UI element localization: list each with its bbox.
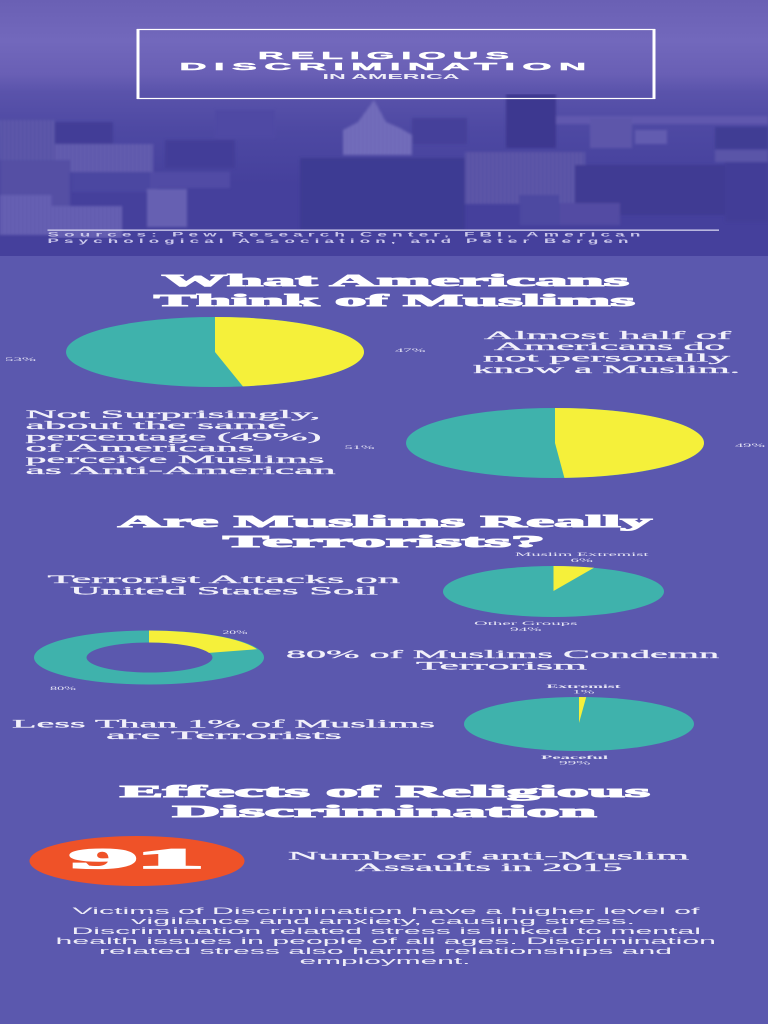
heading: what Americans think: What Americans: [162, 271, 631, 290]
stat badge: 91: 91: [70, 844, 204, 875]
text: almost half: Almost half of: [484, 330, 732, 342]
pie chart: anti-American: [344, 408, 766, 478]
pie chart: extremist share: [464, 684, 694, 766]
heading: what Americans think: Think of Muslims: [154, 291, 637, 310]
text: 80 percent condemn: 80% of Muslims Condemn: [286, 649, 720, 661]
heading: terrorists: [118, 512, 655, 551]
pie chart: know a Muslim: [5, 317, 427, 387]
pie chart: anti-American: 49%: [735, 443, 766, 449]
heading: what Americans think: [154, 271, 637, 310]
text: not surprisingly: about the same: [26, 420, 286, 432]
text: assault count: Assaults in 2015: [355, 862, 623, 874]
text: less than 1 percent: are Terrorists: [106, 730, 344, 742]
pie chart: extremist share: 1%: [572, 690, 596, 696]
text: 80 percent condemn: [286, 649, 720, 672]
heading: terrorists: Terrorists?: [223, 532, 545, 551]
heading: effects: [120, 782, 652, 821]
pie chart: extremist share: Peaceful: [541, 755, 610, 761]
pie chart: attacks by group: 94%: [510, 627, 543, 633]
text: terrorist attacks: Terrorist Attacks on: [48, 574, 401, 586]
text: not surprisingly: Not Surprisingly,: [26, 409, 321, 421]
text: less than 1 percent: [12, 718, 437, 742]
text: almost half: Americans do: [494, 341, 726, 353]
text: almost half: not personally: [483, 352, 731, 364]
donut chart: condemn terrorism: [34, 630, 264, 692]
text: almost half: [473, 330, 740, 376]
paragraph: effects of stress: Victims of Discrimination have a higher level of: [72, 906, 701, 917]
text: less than 1 percent: Less Than 1% of Muslims: [12, 718, 437, 730]
title: DISCRIMINATION: [180, 61, 594, 73]
title: [180, 50, 594, 81]
pie chart: attacks by group: [443, 552, 664, 633]
sources: Psychological Association, and Peter Bergen: [48, 239, 634, 245]
pie chart: know a Muslim: 53%: [5, 357, 37, 363]
heading: terrorists: Are Muslims Really: [118, 512, 655, 531]
pie chart: attacks by group: Other Groups: [474, 621, 578, 627]
paragraph: effects of stress: [56, 906, 716, 967]
title: RELIGIOUS: [258, 50, 516, 62]
pie chart: know a Muslim: 47%: [395, 348, 427, 354]
pie chart: attacks by group: 6%: [570, 558, 594, 564]
text: not surprisingly: perceive Muslims: [26, 454, 326, 466]
text: terrorist attacks: United States Soil: [70, 586, 378, 598]
text: almost half: know a Muslim.: [473, 364, 740, 376]
paragraph: effects of stress: related stress also harms relationships and: [99, 946, 672, 957]
pie chart: anti-American: 51%: [344, 445, 376, 451]
text: not surprisingly: [26, 409, 336, 477]
header: city skyline photo: [0, 0, 768, 256]
paragraph: effects of stress: employment.: [300, 956, 470, 967]
donut chart: condemn terrorism: 20%: [222, 630, 249, 636]
sources: [48, 230, 719, 245]
text: not surprisingly: of Americans: [26, 442, 256, 454]
text: assault count: [288, 850, 689, 874]
stat badge: 91: [30, 836, 244, 886]
paragraph: effects of stress: health issues in people of all ages. Discrimination: [56, 936, 716, 947]
pie chart: attacks by group: Muslim Extremist: [515, 552, 650, 558]
donut chart: condemn terrorism: 80%: [50, 686, 77, 692]
title: IN AMERICA: [322, 74, 460, 81]
text: assault count: Number of anti-Muslim: [288, 850, 689, 862]
text: 80 percent condemn: Terrorism: [416, 660, 587, 672]
heading: effects: Discrimination: [172, 802, 596, 821]
pie chart: extremist share: 99%: [559, 760, 592, 766]
title frame: [138, 29, 654, 99]
text: not surprisingly: as Anti-American: [26, 465, 336, 477]
text: terrorist attacks: [48, 574, 401, 598]
heading: effects: Effects of Religious: [120, 782, 652, 801]
pie chart: extremist share: Extremist: [546, 684, 621, 690]
paragraph: effects of stress: Discrimination related stress is linked to mental: [72, 926, 701, 937]
sources: Sources: Pew Research Center, FBI, American: [48, 232, 646, 238]
paragraph: effects of stress: vigilance and anxiety, causing stress.: [131, 916, 635, 927]
text: not surprisingly: percentage (49%): [26, 432, 322, 444]
